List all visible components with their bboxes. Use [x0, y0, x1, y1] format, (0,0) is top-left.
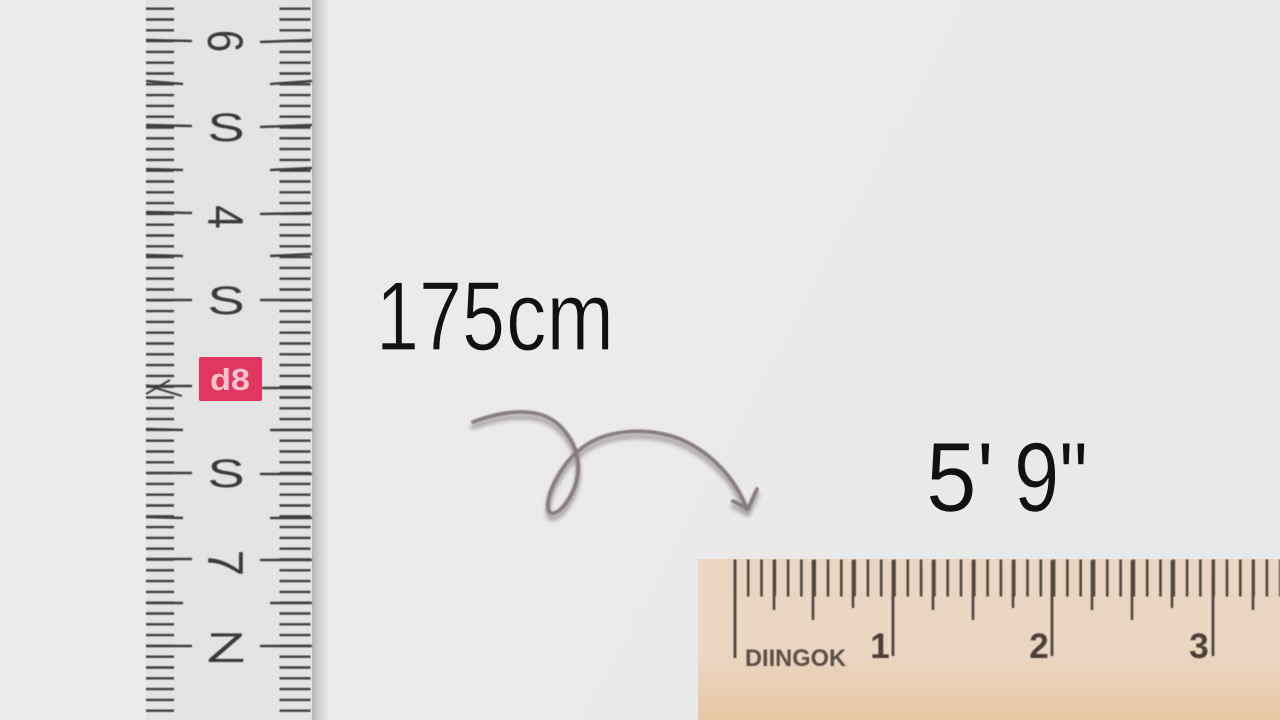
measurement 175cm: [376, 261, 614, 371]
horizontal wooden ruler: [698, 559, 1280, 720]
number 7: 7: [197, 550, 252, 576]
pink marker label: d8: [210, 362, 250, 397]
measurement 5 feet 9 inches: [926, 422, 1088, 532]
ruler body: [698, 559, 1280, 720]
vertical ruler: [146, 0, 330, 720]
ruler numbers: [197, 30, 253, 671]
number 5 upper: S: [207, 106, 245, 150]
inch numbers: [870, 627, 1209, 666]
ruler tick marks: [734, 560, 1280, 658]
number 1: 1: [870, 627, 890, 666]
curly arrow: [473, 412, 757, 518]
number 3: 3: [1189, 627, 1209, 666]
number 2: 2: [1029, 627, 1049, 666]
number 4: 4: [197, 205, 253, 229]
letter Z: Z: [207, 625, 245, 671]
ruler brand text: DIINGOK: [745, 645, 847, 672]
feet value: 5': [926, 422, 994, 532]
pink marker label: [199, 357, 262, 401]
number 5 middle: S: [207, 279, 245, 323]
digits 175: 175: [376, 261, 505, 371]
number 6: 6: [197, 30, 253, 52]
inches value: 9": [1014, 422, 1088, 532]
ruler tick marks: [146, 0, 312, 720]
number 5 lower: S: [207, 452, 245, 496]
unit cm: cm: [506, 261, 614, 371]
ruler body: [146, 0, 330, 720]
